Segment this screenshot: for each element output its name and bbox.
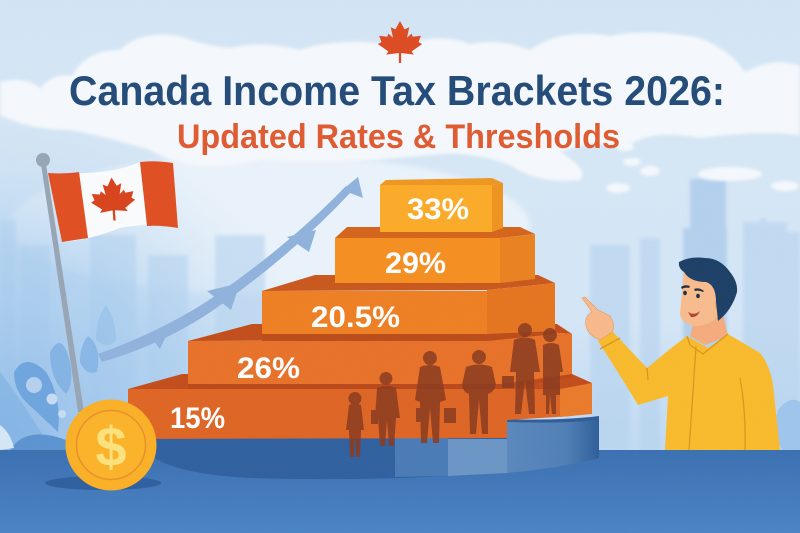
label: 33%: 33% xyxy=(407,193,469,226)
neck xyxy=(690,310,728,345)
title: Canada Income Tax Brackets 2026: xyxy=(69,67,725,114)
floor xyxy=(0,450,800,533)
label: 20.5%: 20.5% xyxy=(311,301,400,334)
figure: man 3 xyxy=(462,350,496,434)
figure: man 4 xyxy=(502,323,540,414)
hair xyxy=(679,258,737,321)
lower-left blue haze xyxy=(0,100,340,450)
presenter man xyxy=(582,258,780,450)
ear xyxy=(714,298,728,312)
label: 29%: 29% xyxy=(385,247,446,280)
pyramid shadow xyxy=(150,436,510,479)
figure: woman 2 xyxy=(543,328,563,414)
pyramid block: 33% xyxy=(380,178,503,232)
coin shadow xyxy=(45,476,161,490)
pyramid block: 29% xyxy=(335,227,535,283)
tall tower xyxy=(683,179,727,348)
pyramid block: 15% xyxy=(128,374,592,439)
silhouettes of taxpayers xyxy=(346,323,563,457)
face xyxy=(680,271,721,326)
flag maple leaf xyxy=(90,176,136,222)
label: 15%: 15% xyxy=(170,402,225,435)
yellow shirt xyxy=(598,331,780,450)
background skyline xyxy=(0,218,800,450)
top maple leaf icon xyxy=(378,21,422,63)
smile xyxy=(688,311,700,317)
subtitle: Updated Rates & Thresholds xyxy=(177,118,620,156)
figure: woman 1 xyxy=(346,392,364,457)
flag pole xyxy=(36,153,84,412)
rising trend arrow xyxy=(98,177,363,362)
Canadian flag xyxy=(48,161,178,242)
figure: man 1 xyxy=(371,372,400,446)
dollar sign: $ xyxy=(95,415,127,478)
light haze around flag and arrow xyxy=(10,155,530,295)
foliage left xyxy=(0,305,116,450)
eyes xyxy=(681,285,704,298)
clouds behind title xyxy=(0,32,800,193)
stepped blue base xyxy=(395,416,599,477)
label: 26%: 26% xyxy=(237,352,300,385)
pyramid block: 26% xyxy=(188,324,572,389)
pyramid block: 20.5% xyxy=(262,275,555,341)
pointing hand xyxy=(582,297,614,340)
figure: man 2 xyxy=(415,351,456,443)
dollar coin xyxy=(66,400,156,490)
shirt folds xyxy=(600,334,745,450)
foliage right xyxy=(776,400,800,450)
